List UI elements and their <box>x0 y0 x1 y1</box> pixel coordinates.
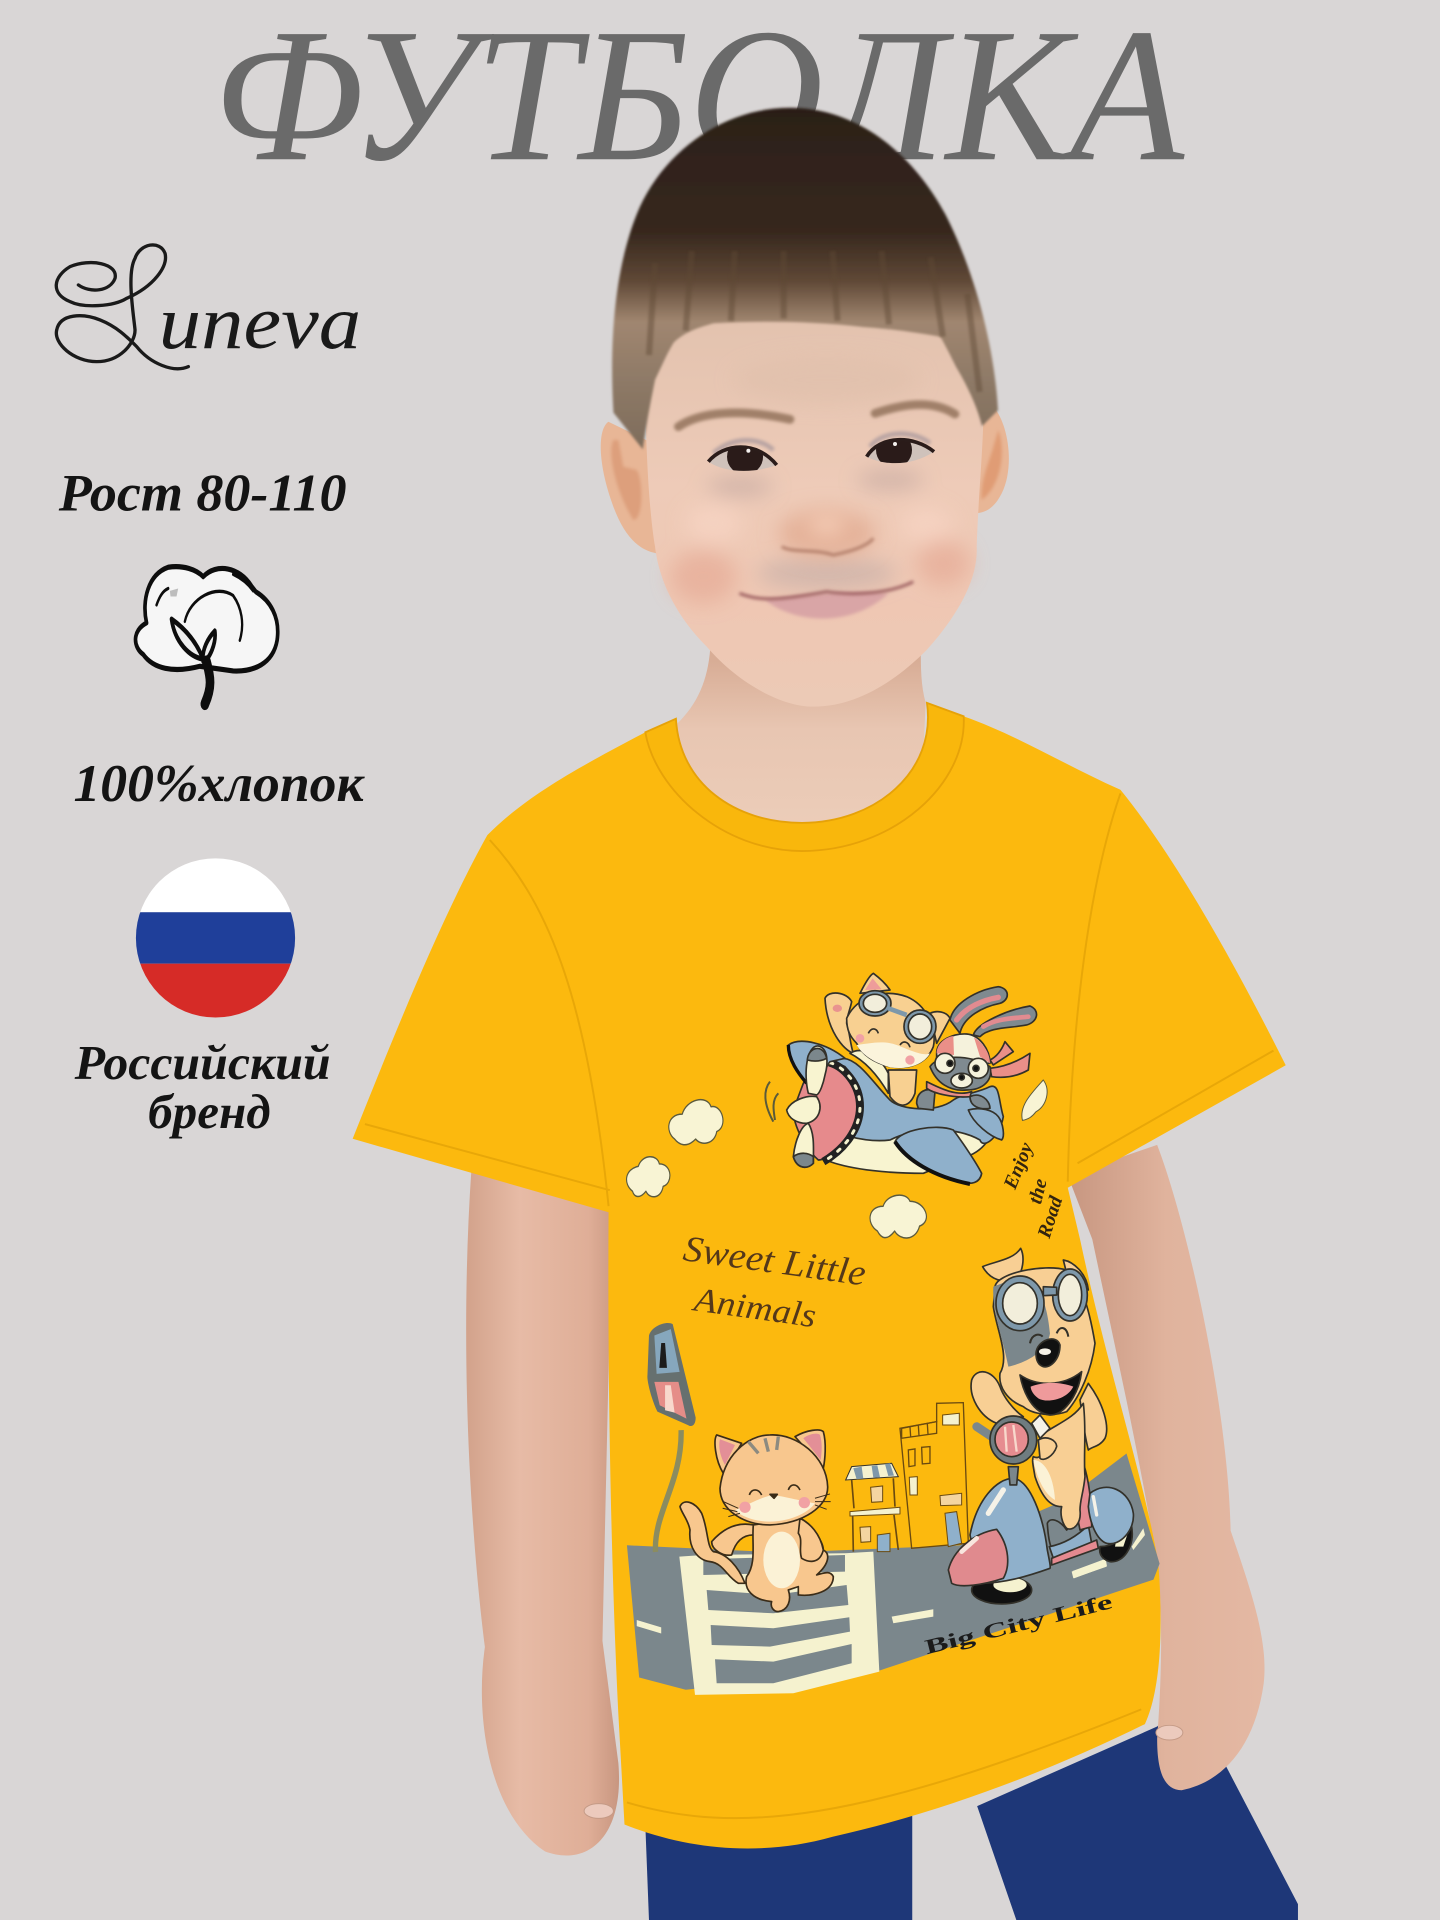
small cloud by the plane <box>1022 1080 1047 1120</box>
nose <box>778 510 875 557</box>
t-shirt <box>353 703 1286 1848</box>
face <box>643 310 983 707</box>
rear wheel <box>1100 1527 1132 1562</box>
front mudguard <box>948 1529 1008 1586</box>
brand text: бренд <box>148 1084 271 1139</box>
dog face <box>1036 1339 1060 1367</box>
crosswalk <box>679 1552 933 1695</box>
fuselage <box>830 1131 990 1173</box>
rear body <box>1088 1487 1133 1544</box>
dog tail <box>1080 1383 1107 1450</box>
propeller <box>806 1046 827 1095</box>
hand details <box>584 1725 1183 1818</box>
ears <box>983 1248 1023 1281</box>
clouds <box>627 1100 926 1238</box>
cat pilot back <box>825 993 853 1053</box>
right arm <box>1068 1145 1265 1790</box>
road dashes <box>1072 1560 1107 1578</box>
headlight <box>977 1427 992 1437</box>
logo: Luneva <box>56 245 361 369</box>
road <box>627 1453 1160 1690</box>
print text: Big City Life: Big City Life <box>922 1589 1115 1659</box>
icon: cotton boll <box>136 567 278 704</box>
floor and seat <box>1047 1513 1092 1548</box>
print text: Enjoy the Road <box>1000 1140 1068 1242</box>
logo: Luneva: Luneva <box>157 281 361 365</box>
jeans <box>645 1684 1298 1920</box>
print text: Sweet Little Animals <box>681 1227 869 1335</box>
scooter and dog <box>948 1248 1145 1604</box>
front wheel <box>972 1576 1032 1604</box>
print text: Enjoy the Road: the <box>1025 1176 1052 1206</box>
neck <box>676 649 926 839</box>
boy photo <box>353 108 1298 1920</box>
print <box>627 973 1160 1695</box>
left eye <box>707 445 778 471</box>
road marks <box>637 1559 1107 1633</box>
right ear <box>970 407 1009 513</box>
print text: Sweet Little Animals: Sweet Little <box>681 1227 869 1293</box>
cheek highlights and shading <box>670 357 970 603</box>
upper wing <box>788 1041 845 1083</box>
size text: Рост 80-110 <box>58 465 347 523</box>
print text: Enjoy the Road: Enjoy <box>1000 1140 1038 1193</box>
right eye <box>865 438 936 464</box>
buildings <box>846 1403 968 1552</box>
icon: Russian flag <box>135 857 296 1019</box>
goggles <box>996 1276 1044 1331</box>
dog head <box>993 1268 1095 1414</box>
brand text: Российский <box>74 1035 331 1090</box>
mouth <box>739 582 913 619</box>
material text: 100%хлопок <box>73 755 365 813</box>
plane with pilots <box>765 973 1037 1184</box>
front shield <box>970 1478 1050 1583</box>
print text: Enjoy the Road: Road <box>1034 1193 1068 1242</box>
eyebrows <box>678 405 955 427</box>
lower wing <box>895 1127 982 1183</box>
head <box>601 310 1009 707</box>
left ear <box>601 422 660 553</box>
rabbit <box>950 987 1007 1033</box>
dog body <box>1033 1403 1085 1529</box>
eyelids <box>713 434 930 453</box>
cat and crossing <box>679 1403 968 1695</box>
cat pilot head <box>847 993 934 1067</box>
hair <box>612 108 998 449</box>
print text: Sweet Little Animals: Animals <box>690 1280 818 1335</box>
brand text <box>74 1035 331 1139</box>
traffic light <box>647 1323 696 1552</box>
cat <box>680 1430 833 1612</box>
left arm <box>466 1169 619 1856</box>
dog paw <box>971 1372 1023 1423</box>
